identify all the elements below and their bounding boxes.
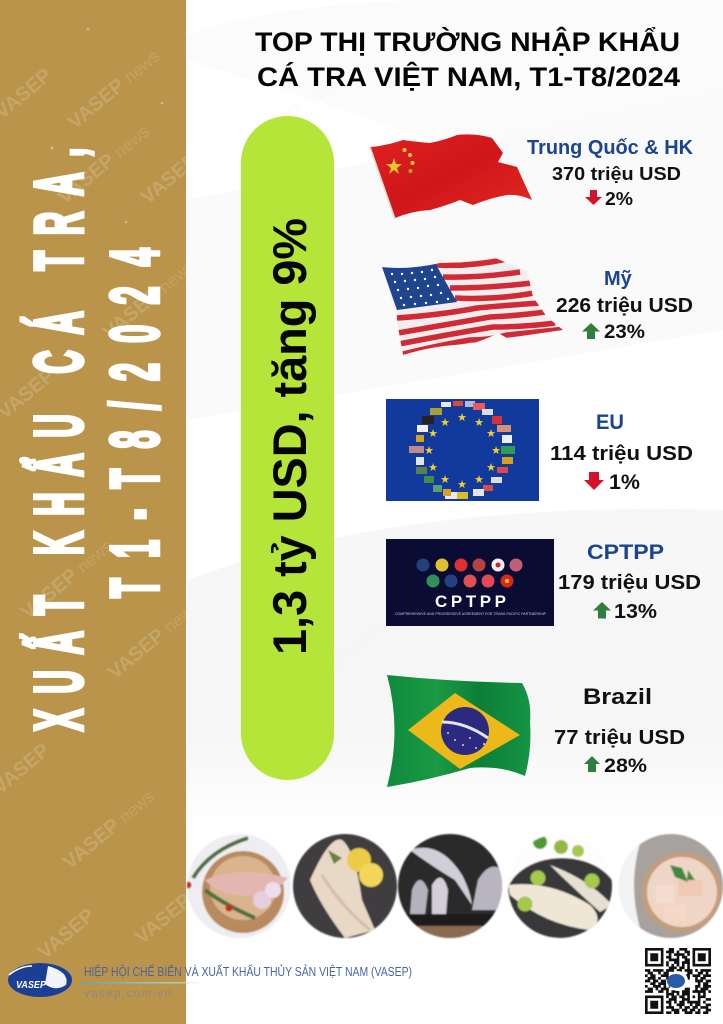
watermark pattern: VASEP bbox=[104, 624, 169, 684]
watermark pattern: VASEP bbox=[64, 74, 129, 134]
flag: EU: ★ bbox=[474, 417, 484, 429]
watermark pattern: news bbox=[161, 597, 203, 637]
logo: CPTPP: CPTPP bbox=[435, 592, 506, 611]
watermark pattern: VASEP bbox=[137, 149, 202, 209]
change: 2% bbox=[605, 188, 633, 209]
change bbox=[585, 188, 633, 209]
watermark pattern: news bbox=[346, 617, 388, 657]
watermark pattern: news bbox=[74, 537, 116, 577]
QR code bbox=[644, 947, 712, 1015]
value: 114 triệu USD bbox=[550, 442, 693, 465]
market: China and Hong Kong bbox=[370, 134, 694, 219]
sidebar title line 2: T1-T8/2024 bbox=[98, 248, 173, 598]
website: vasep.com.vn bbox=[84, 988, 171, 1000]
flag: EU: ★ bbox=[457, 479, 467, 491]
watermark pattern: news bbox=[121, 47, 163, 87]
change bbox=[593, 601, 657, 623]
change: 28% bbox=[604, 755, 647, 777]
market: Brazil bbox=[387, 675, 685, 787]
watermark pattern: VASEP bbox=[289, 644, 354, 704]
change bbox=[584, 471, 640, 494]
watermark pattern bbox=[0, 45, 519, 964]
total export value: 1,3 tỷ USD, tăng 9% bbox=[263, 218, 316, 655]
main title: TOP THỊ TRƯỜNG NHẬP KHẨU bbox=[255, 26, 680, 57]
VASEP logo bbox=[8, 963, 72, 997]
flag: EU: ★ bbox=[424, 445, 434, 457]
flag: EU bbox=[386, 399, 539, 501]
organisation name: HIỆP HỘI CHẾ BIẾN VÀ XUẤT KHẨU THỦY SẢN VIỆT NAM (VASEP) bbox=[84, 964, 412, 979]
photo: fillet with lime bbox=[506, 834, 618, 938]
photo: diced fish in bowl bbox=[618, 834, 723, 938]
flag: EU: ★ bbox=[491, 445, 501, 457]
flag: EU: ★ bbox=[486, 428, 496, 440]
logo: CPTPP bbox=[386, 539, 554, 626]
label: Brazil bbox=[583, 684, 652, 709]
value: 77 triệu USD bbox=[554, 727, 685, 749]
change: 23% bbox=[604, 321, 645, 343]
logo: CPTPP: COMPREHENSIVE AND PROGRESSIVE AGREEMENT FOR TRANS-PACIFIC PARTNERSHIP bbox=[395, 612, 547, 616]
watermark pattern: VASEP bbox=[244, 99, 309, 159]
photo: pangasius catch bbox=[398, 834, 503, 938]
watermark pattern: news bbox=[476, 127, 518, 167]
watermark pattern: news bbox=[116, 787, 158, 827]
flag: EU: ★ bbox=[428, 462, 438, 474]
flag: EU: ★ bbox=[440, 474, 450, 486]
change: 13% bbox=[614, 601, 657, 623]
watermark pattern: news bbox=[111, 122, 153, 162]
label: CPTPP bbox=[587, 541, 664, 564]
watermark pattern: news bbox=[156, 257, 198, 297]
photo: fillet with lemon bbox=[292, 834, 398, 938]
photo: fillet on wooden board bbox=[184, 834, 291, 938]
flag: United States bbox=[382, 257, 563, 355]
label: EU bbox=[596, 411, 624, 434]
main title bbox=[255, 26, 680, 92]
watermark pattern: VASEP bbox=[34, 904, 99, 964]
flag: EU: ★ bbox=[428, 428, 438, 440]
flag: Brazil bbox=[387, 675, 530, 787]
market: CPTPP bbox=[386, 539, 701, 626]
flag: EU: ★ bbox=[486, 462, 496, 474]
change bbox=[584, 755, 647, 777]
label: Trung Quốc & HK bbox=[527, 137, 694, 159]
market: EU bbox=[386, 399, 693, 501]
watermark pattern: VASEP bbox=[17, 564, 82, 624]
label: Mỹ bbox=[604, 268, 633, 290]
watermark pattern: news bbox=[301, 72, 343, 112]
flag: EU: ★ bbox=[440, 417, 450, 429]
value: 226 triệu USD bbox=[556, 295, 693, 317]
watermark pattern: VASEP bbox=[54, 149, 119, 209]
value: 370 triệu USD bbox=[552, 163, 681, 184]
change: 1% bbox=[609, 471, 640, 494]
watermark pattern: VASEP bbox=[131, 889, 196, 949]
watermark pattern: VASEP bbox=[419, 154, 484, 214]
change bbox=[582, 321, 645, 343]
watermark pattern: VASEP bbox=[99, 284, 164, 344]
main title: CÁ TRA VIỆT NAM, T1-T8/2024 bbox=[257, 61, 680, 92]
value: 179 triệu USD bbox=[558, 571, 701, 594]
VASEP logo: VASEP bbox=[16, 980, 46, 991]
watermark pattern: VASEP bbox=[59, 814, 124, 874]
flag: China bbox=[370, 134, 532, 219]
flag: EU: ★ bbox=[474, 474, 484, 486]
left sidebar bbox=[0, 0, 186, 1024]
flag: EU: ★ bbox=[457, 412, 467, 424]
market: United States bbox=[382, 257, 692, 355]
fish photo row bbox=[184, 834, 723, 938]
green pill total bbox=[241, 116, 334, 780]
sidebar title line 1: XUẤT KHẨU CÁ TRA, bbox=[21, 148, 97, 731]
